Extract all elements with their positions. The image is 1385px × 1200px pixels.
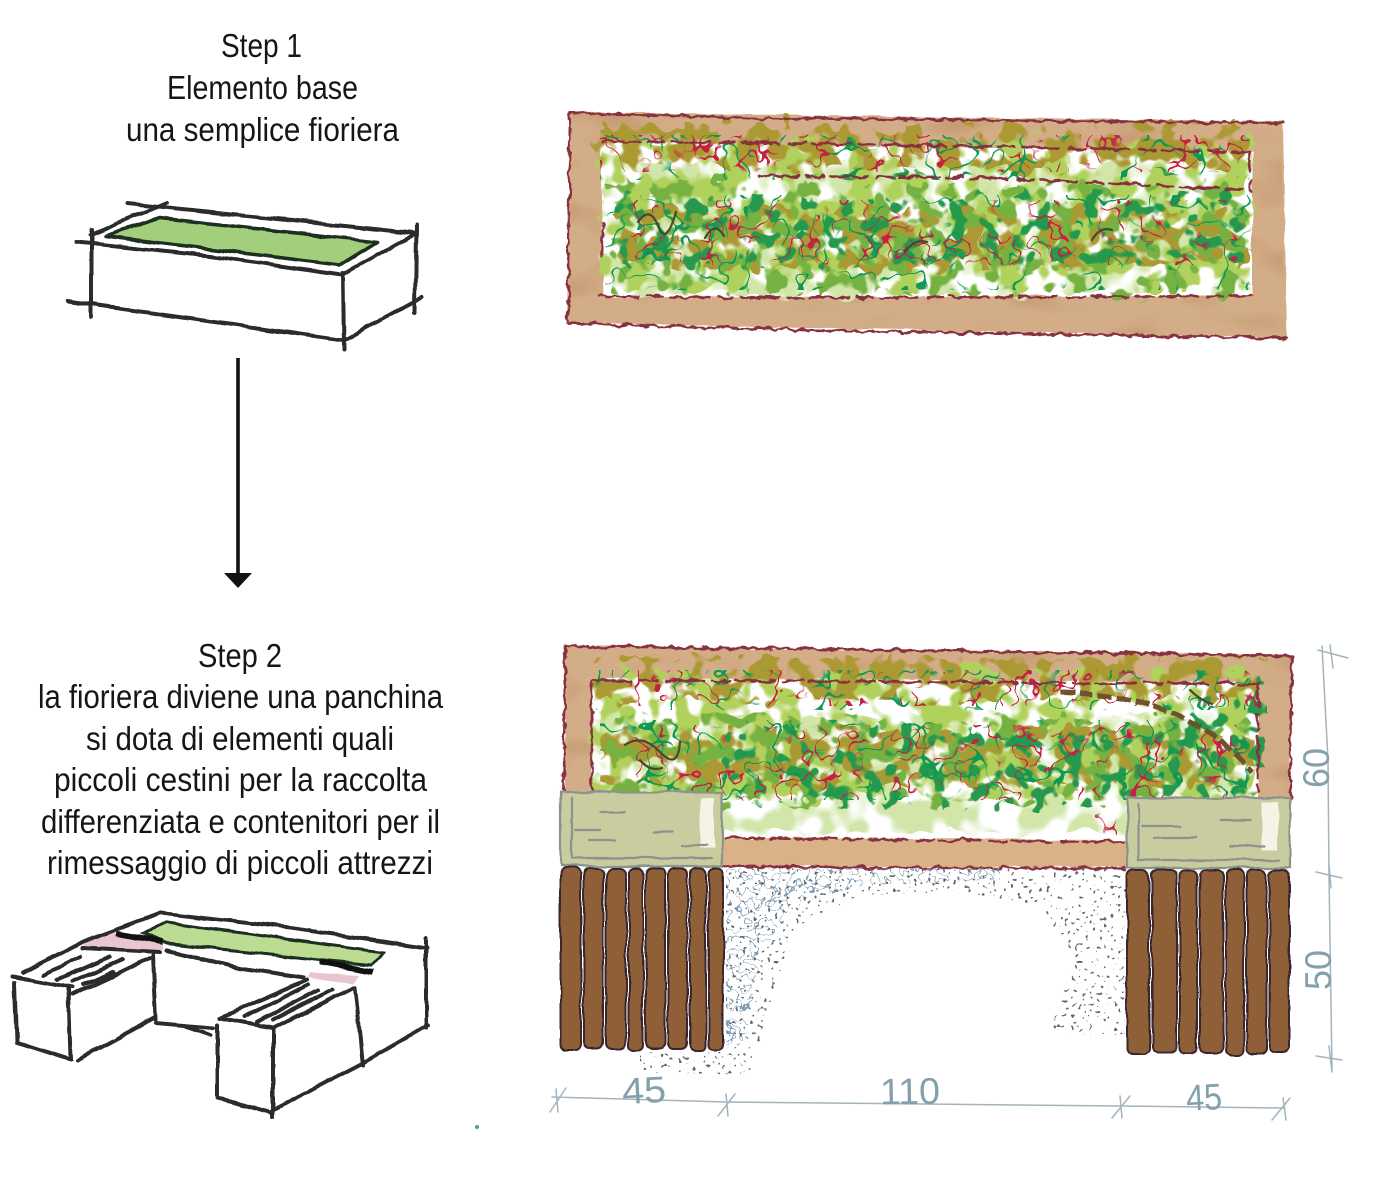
foliage: lime blobs <box>596 670 1256 798</box>
storage box: right <box>1127 798 1290 868</box>
heading: step 2: si dota di elementi quali <box>86 720 394 757</box>
arrow: step 1 to step 2 <box>224 358 252 588</box>
gravel: blue scribbles <box>726 868 1000 1045</box>
storage box: left <box>561 792 722 866</box>
foliage: red scribbles <box>600 135 1250 265</box>
heading: step 1: Elemento base <box>167 69 358 106</box>
foliage: pale wash <box>600 715 1250 833</box>
dimension: vertical: 60 <box>1296 748 1337 788</box>
foliage: olive blobs <box>596 125 1250 268</box>
foliage: red scribbles <box>596 670 1260 835</box>
planter frame: wooden border <box>567 112 1287 338</box>
panel: top-view planter (step 1) <box>567 112 1287 338</box>
sketch: planter bench perspective <box>13 913 428 1117</box>
dimension: vertical: 50 <box>1298 950 1339 990</box>
dimension: vertical <box>1296 645 1348 1072</box>
wooden slats: left seat <box>560 868 723 1051</box>
heading: step 1: Step 1 <box>221 27 302 64</box>
planter soil opening <box>600 142 1252 297</box>
dimension: horizontal: 45 <box>1185 1076 1223 1119</box>
branch <box>1060 692 1252 772</box>
bench outlines <box>564 646 1292 868</box>
foliage: pale wash <box>606 160 1246 296</box>
sketch: base planter perspective <box>67 203 423 350</box>
foliage: deep green blobs <box>720 680 1268 805</box>
wooden slats: right seat <box>1127 870 1289 1055</box>
heading: step 2: rimessaggio di piccoli attrezzi <box>47 844 433 881</box>
heading: step 2: la fioriera diviene una panchina <box>38 678 444 715</box>
foliage: green scribbles <box>596 670 1260 800</box>
foliage: green scribbles <box>600 135 1252 290</box>
foliage: olive blobs <box>596 658 1262 785</box>
heading: step 2 <box>38 637 444 881</box>
planter outlines <box>567 113 1286 338</box>
bench frame: wooden border <box>565 646 1292 800</box>
heading: step 2: differenziata e contenitori per il <box>41 803 440 840</box>
foliage: mid green blobs <box>610 718 1250 803</box>
foliage: deep green blobs <box>615 195 1245 265</box>
heading: step 1: una semplice fioriera <box>126 111 400 148</box>
foliage: lime blobs <box>600 140 1250 290</box>
small speck <box>475 1125 479 1129</box>
dimension: horizontal <box>550 1069 1290 1120</box>
gravel: dots <box>640 868 1125 1075</box>
dimension: horizontal: 45 <box>621 1069 667 1112</box>
dimension: horizontal: 110 <box>880 1070 940 1113</box>
heading: step 2: Step 2 <box>198 637 282 674</box>
heading: step 2: piccoli cestini per la raccolta <box>54 761 428 798</box>
panel: top-view bench (step 2) <box>560 646 1292 1075</box>
bench beam <box>722 838 1126 867</box>
heading: step 1 <box>126 27 400 148</box>
foliage: dark stems <box>638 212 1112 252</box>
foliage: mid green blobs <box>610 182 1246 294</box>
foliage: dark stems <box>625 690 1212 769</box>
